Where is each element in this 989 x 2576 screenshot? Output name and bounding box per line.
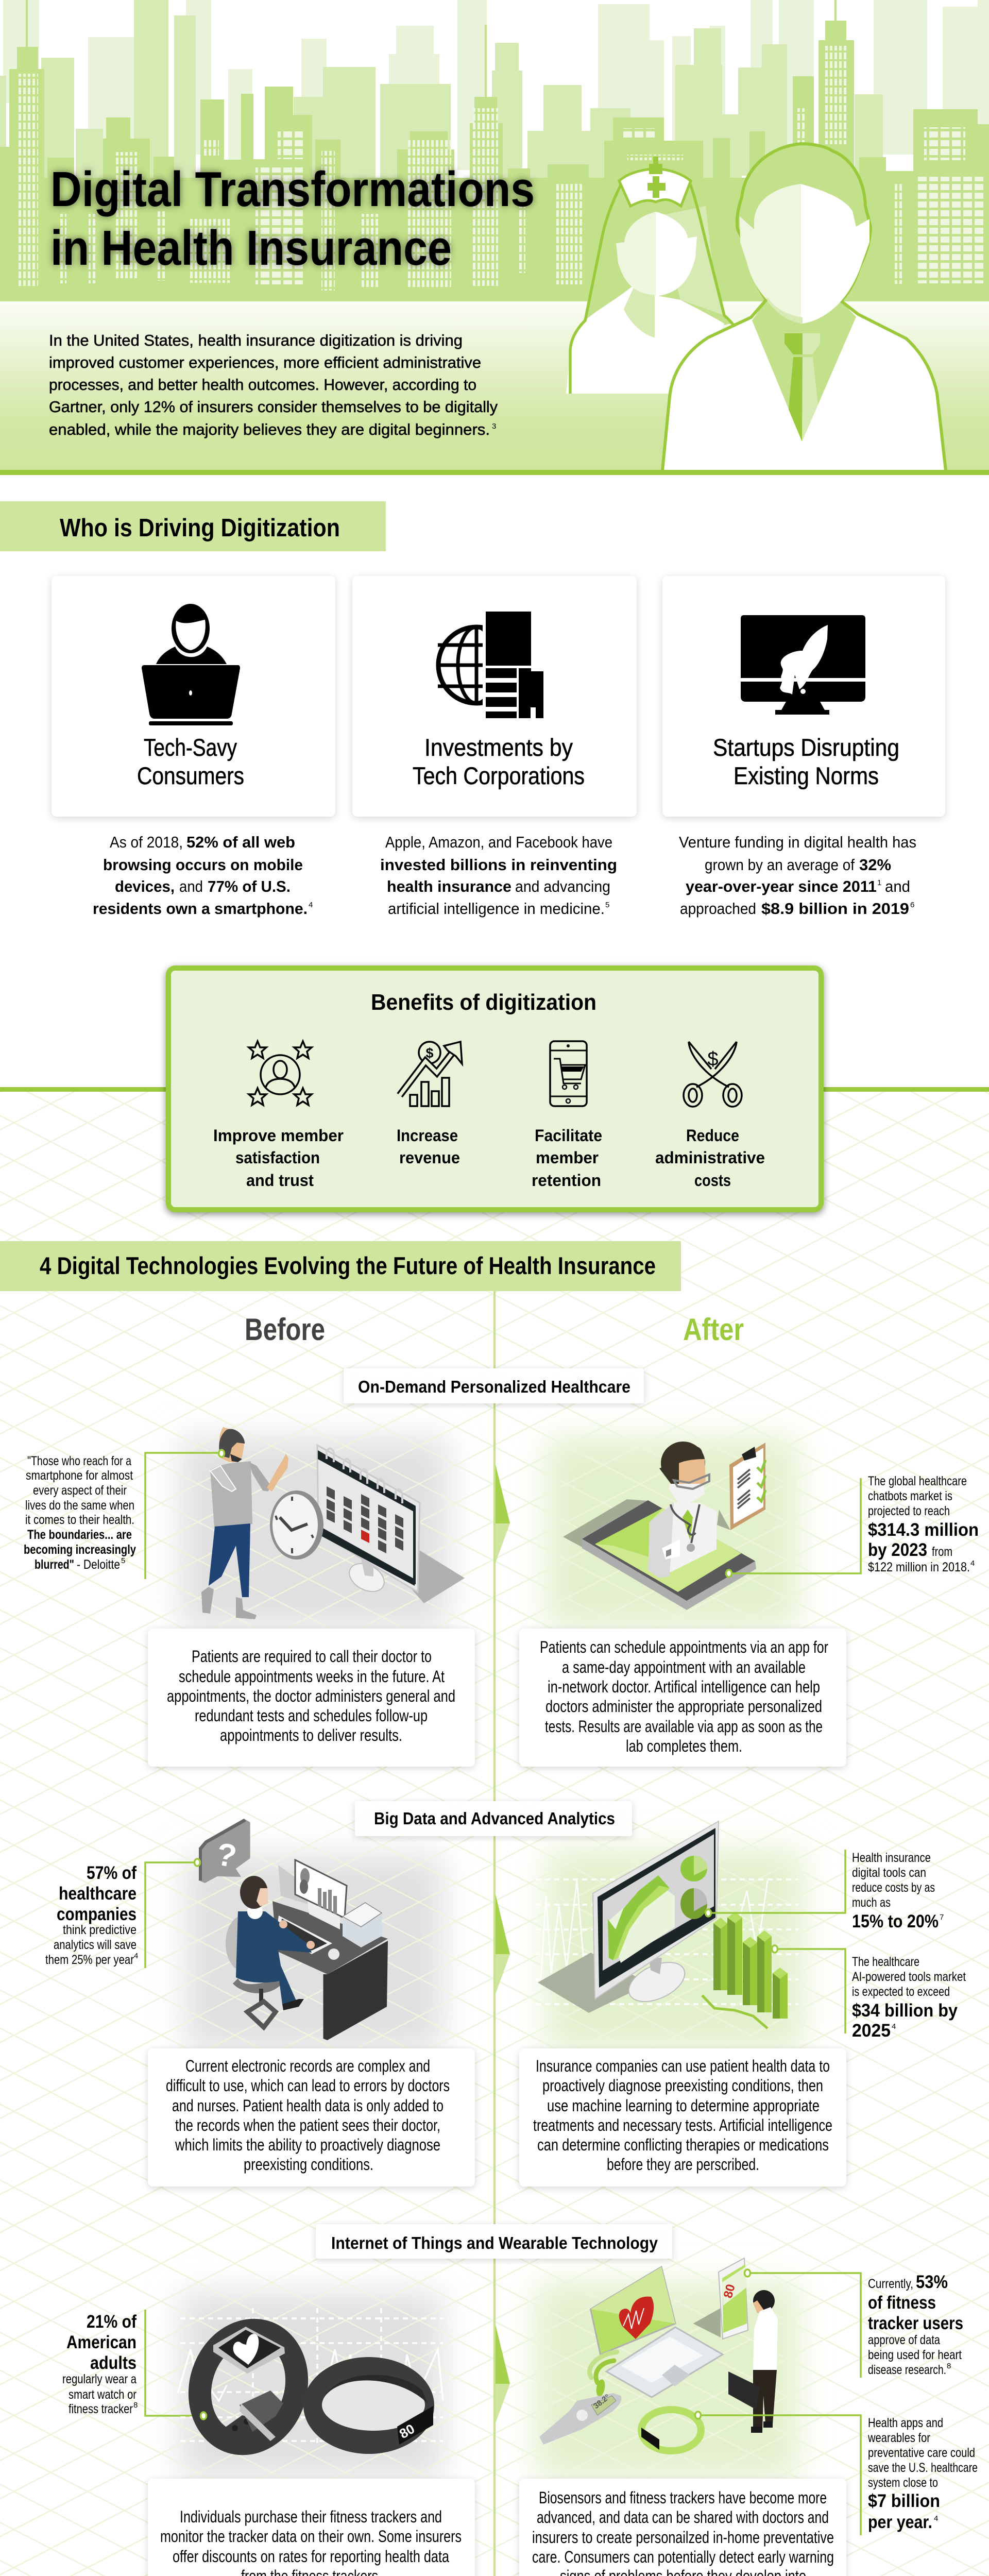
illustration: connected devices: 80 xyxy=(721,2283,738,2300)
callout: 57% of healthcare companies: companies xyxy=(57,1904,137,1924)
card title: Investments by xyxy=(424,734,573,761)
row label: big data and advanced analytics xyxy=(355,1801,632,1836)
callout: 57% of healthcare companies: analytics will save xyxy=(54,1938,137,1952)
text: consumers statistics: 4 xyxy=(309,901,313,909)
intro text: Gartner, only 12% of insurers consider themselves to be digitally xyxy=(49,398,498,416)
panel: after text row 1 xyxy=(519,1629,846,1767)
callout: chatbots market: projected to reach xyxy=(868,1504,950,1518)
label: reduce administrative costs xyxy=(655,1126,765,1190)
panel: after text row 2: use machine learning to determine appropriate xyxy=(547,2096,820,2115)
callout: 21% of american adults: 8 xyxy=(133,2401,138,2410)
panel: investments by tech corporations xyxy=(352,576,637,817)
callout: 57% of healthcare companies: healthcare xyxy=(59,1884,137,1904)
callout: deloitte quote: becoming increasingly xyxy=(24,1543,136,1557)
intro text: processes, and better health outcomes. However, according to xyxy=(49,376,476,394)
heading: Benefits of digitization xyxy=(371,990,596,1015)
callout: 21% of american adults: adults xyxy=(90,2353,137,2373)
heading: who is driving digitization: Who is Driving Digitization xyxy=(60,514,340,542)
icon: globe and buildings xyxy=(438,612,543,718)
text: corporations statistics: 5 xyxy=(605,901,609,909)
label: facilitate member retention: member xyxy=(536,1148,599,1167)
illustration: worker at desk: ? xyxy=(214,1836,239,1875)
callout: 57% of healthcare companies: 57% of xyxy=(87,1863,137,1883)
card title: Startups Disrupting xyxy=(713,734,899,761)
label: increase revenue: revenue xyxy=(399,1148,460,1167)
illustration: patient with calendar and clock xyxy=(201,1427,465,1619)
callout: ai-powered tools market: 4 xyxy=(892,2022,896,2031)
panel: after text row 2: can determine conflicting therapies or medications xyxy=(537,2136,829,2154)
callout: 53% of fitness tracker users: disease research. xyxy=(868,2363,946,2377)
callout: 53% of fitness tracker users: 8 xyxy=(947,2362,951,2370)
text: consumers statistics xyxy=(93,833,313,918)
text: corporations statistics: artificial intelligence in medicine. xyxy=(388,900,605,918)
text: startups statistics: 6 xyxy=(910,901,914,909)
callout: 53% of fitness tracker users: being used for heart xyxy=(868,2348,962,2362)
callout: chatbots market: chatbots market is xyxy=(868,1489,952,1503)
panel: after text row 1: tests. Results are available via app as soon as the xyxy=(545,1717,823,1736)
callout: 53% of fitness tracker users: tracker users xyxy=(868,2313,963,2333)
heading: who is driving digitization xyxy=(0,501,386,551)
panel: after text row 2 xyxy=(519,2048,846,2187)
green rule behind benefits xyxy=(0,1087,989,1092)
intro text: improved customer experiences, more efficient administrative xyxy=(49,353,481,371)
callout: 21% of american adults: 21% of xyxy=(87,2312,137,2332)
label: facilitate member retention: Facilitate xyxy=(535,1126,602,1145)
callout: wearables savings: 4 xyxy=(934,2514,938,2523)
panel: before text row 2 xyxy=(148,2048,475,2187)
intro text: 3 xyxy=(492,422,496,431)
panel: before text row 3: offer discounts on rates for reporting health data xyxy=(173,2547,449,2566)
label: improve member satisfaction: Improve member xyxy=(213,1126,344,1145)
icon: monitor with rocket xyxy=(741,615,865,715)
label: improve member satisfaction: and trust xyxy=(246,1171,314,1190)
row label: on-demand personalized healthcare: On-Demand Personalized Healthcare xyxy=(358,1377,630,1396)
panel: after text row 1: doctors administer the appropriate personalized xyxy=(545,1697,822,1716)
column heading: before: Before xyxy=(245,1312,325,1347)
callout: chatbots market: by 2023 xyxy=(868,1540,927,1560)
callout: 21% of american adults: fitness tracker xyxy=(69,2402,133,2416)
panel: before text row 2: difficult to use, which can lead to errors by doctors xyxy=(166,2076,450,2095)
callout: 53% of fitness tracker users xyxy=(750,2272,963,2378)
callout: 57% of healthcare companies: them 25% per year xyxy=(45,1953,134,1967)
panel: before text row 2: and nurses. Patient health data is only added to xyxy=(172,2096,444,2115)
panel: after text row 1: lab completes them. xyxy=(626,1737,742,1755)
text: startups statistics: approached xyxy=(680,900,756,918)
callout: wearables savings: $7 billion xyxy=(868,2491,940,2511)
text: corporations statistics: health insurance xyxy=(387,877,511,895)
panel: after text row 1: a same-day appointment with an available xyxy=(562,1658,806,1676)
icon: mobile shopping xyxy=(550,1041,587,1106)
card title: Tech Corporations xyxy=(413,762,585,789)
callout: ai-powered tools market: The healthcare xyxy=(852,1955,919,1969)
callout: deloitte quote: smartphone for almost xyxy=(26,1468,133,1483)
panel: after text row 2: before they are perscribed. xyxy=(607,2155,759,2174)
arrow: row 3 xyxy=(496,2325,510,2423)
callout: deloitte quote: - Deloitte xyxy=(77,1557,120,1572)
text: consumers statistics: residents own a smartphone. xyxy=(93,900,308,918)
label: facilitate member retention xyxy=(532,1126,602,1190)
text: consumers statistics: devices, xyxy=(115,877,175,895)
panel: after text row 3: advanced, and data can be shared with doctors and xyxy=(537,2508,829,2527)
panel: startups disrupting existing norms xyxy=(662,576,945,817)
text: consumers statistics: 77% of U.S. xyxy=(208,877,291,895)
callout: 21% of american adults: smart watch or xyxy=(69,2387,137,2402)
title: Digital Transformations xyxy=(50,162,535,217)
intro text: In the United States, health insurance digitization is driving xyxy=(49,331,463,349)
panel: before text row 3: monitor the tracker data on their own. Some insurers xyxy=(160,2527,462,2546)
illustration: analytics monitor and bars xyxy=(536,1821,798,2028)
label: increase revenue: Increase xyxy=(397,1126,458,1145)
icon: member satisfaction xyxy=(249,1041,312,1105)
panel: after text row 3 xyxy=(519,2479,846,2576)
illustration: worker at desk xyxy=(195,1819,388,2040)
illustration: connected devices: 38.2° xyxy=(592,2393,611,2411)
illustration: nurse xyxy=(566,157,735,394)
callout: deloitte quote: every aspect of their xyxy=(33,1483,127,1498)
icon: person with laptop xyxy=(142,604,240,725)
center divider xyxy=(493,1291,496,2576)
callout: chatbots market xyxy=(731,1474,979,1574)
card title: Tech-Savy xyxy=(144,734,237,761)
text: consumers statistics: 52% of all web xyxy=(186,833,295,851)
panel: after text row 3: insurers to create personailzed in-home preventative xyxy=(532,2528,834,2547)
panel: before text row 1: Patients are required to call their doctor to xyxy=(192,1647,432,1666)
label: reduce administrative costs: Reduce xyxy=(686,1126,739,1145)
callout: ai-powered tools market: is expected to exceed xyxy=(852,1985,950,1999)
callout: chatbots market: 4 xyxy=(970,1559,975,1568)
text: consumers statistics: browsing occurs on mobile xyxy=(103,856,303,874)
text: startups statistics: 32% xyxy=(859,856,891,874)
panel: benefits of digitization xyxy=(168,968,821,1210)
panel: before text row 3: Individuals purchase their fitness trackers and xyxy=(180,2507,442,2526)
callout: 53% of fitness tracker users: approve of data xyxy=(868,2333,940,2347)
card title xyxy=(713,734,899,789)
row label: on-demand personalized healthcare xyxy=(344,1368,644,1403)
panel: before text row 1 xyxy=(148,1629,475,1767)
panel: before text row 1: schedule appointments weeks in the future. At xyxy=(179,1667,445,1686)
card title xyxy=(413,734,585,789)
label: increase revenue xyxy=(397,1126,460,1167)
header gradient band xyxy=(0,301,989,470)
title xyxy=(50,162,535,276)
heading: 4 digital technologies: 4 Digital Technologies Evolving the Future of Health Insurance xyxy=(40,1252,656,1279)
callout: ai-powered tools market: AI-powered tools market xyxy=(852,1970,966,1984)
callout: digital tools reduce costs xyxy=(711,1850,944,1931)
text: consumers statistics: and xyxy=(179,877,203,895)
callout: chatbots market: $122 million in 2018. xyxy=(868,1560,970,1574)
label: reduce administrative costs: costs xyxy=(694,1171,731,1190)
callout: ai-powered tools market: 2025 xyxy=(852,2021,891,2041)
callout: deloitte quote: 5 xyxy=(121,1556,125,1565)
text: startups statistics: Venture funding in digital health has xyxy=(679,833,916,851)
row label: internet of things xyxy=(316,2224,672,2259)
header: city skyline background xyxy=(0,0,989,301)
text: startups statistics: and xyxy=(885,877,910,895)
label: facilitate member retention: retention xyxy=(532,1171,601,1190)
callout: 53% of fitness tracker users: Currently, xyxy=(868,2277,913,2291)
callout: deloitte quote: blurred" xyxy=(35,1557,74,1572)
callout: 57% of healthcare companies: 4 xyxy=(134,1952,138,1960)
panel: before text row 2: the records when the patient sees their doctor, xyxy=(175,2116,440,2134)
icon: scissors: $ xyxy=(707,1048,719,1070)
label: reduce administrative costs: administrative xyxy=(655,1148,765,1167)
panel: after text row 3: Biosensors and fitness trackers have become more xyxy=(539,2488,827,2507)
panel: after text row 2: treatments and necessary tests. Artificial intelligence xyxy=(533,2116,832,2134)
callout: wearables savings: Health apps and xyxy=(868,2416,943,2430)
panel: after text row 1: in-network doctor. Artifical intelligence can help xyxy=(548,1677,820,1696)
callout: deloitte quote: it comes to their health. xyxy=(25,1513,134,1527)
callout: wearables savings xyxy=(701,2415,978,2535)
callout: 57% of healthcare companies xyxy=(45,1862,195,1968)
text: startups statistics: $8.9 billion in 2019 xyxy=(761,900,909,918)
intro text: enabled, while the majority believes they are digital beginners. xyxy=(49,420,490,438)
callout: digital tools reduce costs: 7 xyxy=(940,1913,944,1922)
panel: tech-savvy consumers xyxy=(52,576,335,817)
callout: deloitte quote xyxy=(24,1453,219,1579)
panel: before text row 2: Current electronic records are complex and xyxy=(185,2057,430,2075)
callout: chatbots market: from xyxy=(932,1545,952,1559)
callout: chatbots market: The global healthcare xyxy=(868,1474,967,1488)
callout: wearables savings: wearables for xyxy=(867,2431,930,2445)
illustration: smart watch and fitness band xyxy=(178,2308,443,2456)
callout: deloitte quote: lives do the same when xyxy=(25,1498,134,1513)
callout: deloitte quote: "Those who reach for a xyxy=(27,1454,131,1468)
illustration: doctor on phone xyxy=(563,1442,765,1610)
text: corporations statistics xyxy=(380,833,617,918)
text: corporations statistics: and advancing xyxy=(515,877,610,895)
callout: ai-powered tools market: $34 billion by xyxy=(852,2001,958,2021)
illustration: connected devices xyxy=(539,2258,778,2451)
text: startups statistics: year-over-year since 2011 xyxy=(686,877,877,895)
icon: revenue growth: $ xyxy=(425,1045,434,1061)
icon: scissors xyxy=(684,1042,742,1107)
text: corporations statistics: invested billions in reinventing xyxy=(380,856,617,874)
callout: 53% of fitness tracker users: 53% xyxy=(916,2272,948,2292)
text: startups statistics: grown by an average of xyxy=(705,856,855,874)
callout: digital tools reduce costs: Health insurance xyxy=(852,1851,931,1865)
card title: Existing Norms xyxy=(734,762,879,789)
label: improve member satisfaction: satisfaction xyxy=(235,1148,320,1167)
label: improve member satisfaction xyxy=(213,1126,344,1190)
panel: before text row 1: appointments, the doctor administers general and xyxy=(167,1687,455,1705)
icon: revenue growth xyxy=(400,1042,462,1106)
row label: big data and advanced analytics: Big Data and Advanced Analytics xyxy=(374,1809,615,1828)
text: corporations statistics: Apple, Amazon, and Facebook have xyxy=(385,833,612,851)
panel: after text row 3: care. Consumers can potentially detect early warning xyxy=(532,2548,834,2566)
panel: before text row 1: redundant tests and schedules follow-up xyxy=(195,1706,428,1725)
callout: deloitte quote: The boundaries... are xyxy=(27,1528,132,1542)
callout: 57% of healthcare companies: think predictive xyxy=(63,1923,137,1937)
arrow: row 2 xyxy=(496,1894,510,1994)
row label: internet of things: Internet of Things and Wearable Technology xyxy=(331,2233,658,2252)
panel: before text row 3 xyxy=(148,2479,475,2576)
text: consumers statistics: As of 2018, xyxy=(110,833,183,851)
panel: after text row 2: Insurance companies can use patient health data to xyxy=(536,2057,830,2075)
header bottom rule xyxy=(0,470,989,475)
lattice background xyxy=(0,1092,989,2576)
panel: after text row 2: proactively diagnose preexisting conditions, then xyxy=(542,2076,823,2095)
panel: after text row 1: Patients can schedule appointments via an app for xyxy=(540,1638,828,1656)
callout: digital tools reduce costs: 15% to 20% xyxy=(852,1911,939,1931)
panel: before text row 1: appointments to deliver results. xyxy=(220,1726,402,1744)
text: startups statistics xyxy=(679,833,916,918)
intro text xyxy=(49,331,498,438)
panel: before text row 2: preexisting conditions. xyxy=(244,2155,373,2174)
callout: digital tools reduce costs: digital tools can xyxy=(852,1866,926,1880)
callout: digital tools reduce costs: much as xyxy=(852,1895,891,1910)
column heading: after: After xyxy=(683,1312,744,1347)
callout: 21% of american adults xyxy=(62,2310,200,2416)
callout: digital tools reduce costs: reduce costs by as xyxy=(852,1880,935,1895)
title: in Health Insurance xyxy=(50,221,452,276)
callout: wearables savings: system close to xyxy=(868,2476,938,2490)
panel: before text row 2: which limits the ability to proactively diagnose xyxy=(175,2136,440,2154)
callout: wearables savings: per year. xyxy=(868,2512,932,2532)
illustration: smart watch and fitness band: 80 xyxy=(397,2421,417,2442)
card title xyxy=(137,734,244,789)
heading: 4 digital technologies xyxy=(0,1241,681,1291)
card title: Consumers xyxy=(137,762,244,789)
callout: 21% of american adults: regularly wear a xyxy=(62,2372,137,2386)
arrow: row 1 xyxy=(496,1465,510,1563)
illustration: doctor xyxy=(662,144,946,470)
callout: ai-powered tools market xyxy=(777,1949,966,2041)
callout: chatbots market: $314.3 million xyxy=(868,1520,979,1540)
callout: 21% of american adults: American xyxy=(66,2332,137,2352)
callout: 53% of fitness tracker users: of fitness xyxy=(868,2293,936,2313)
text: startups statistics: 1 xyxy=(877,878,881,887)
